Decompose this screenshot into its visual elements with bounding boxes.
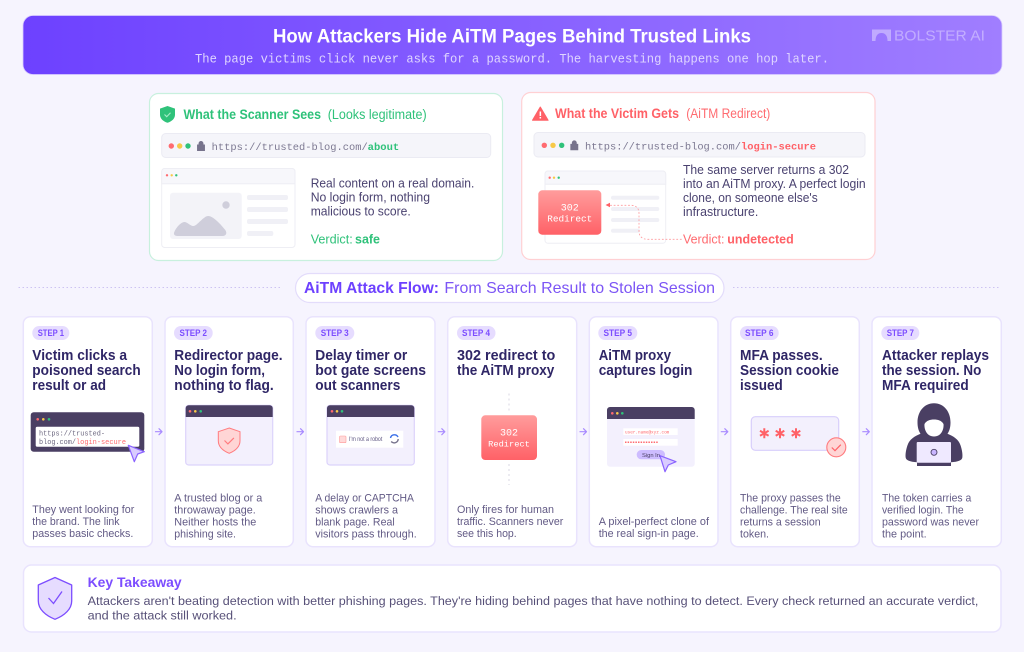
step heading: captures login [599, 363, 692, 379]
step text: token. [740, 528, 769, 540]
section heading: attack flow: From Search Result to Stolen Session [444, 280, 715, 297]
logo: Bolster AI: BOLSTER AI [894, 28, 985, 44]
step badge: STEP 7 [887, 328, 914, 338]
panel: key takeaway [24, 565, 1001, 632]
step heading: the AiTM proxy [457, 363, 555, 379]
step 7 card [872, 317, 1001, 547]
description: infrastructure. [683, 205, 758, 219]
step 6 card [731, 317, 859, 547]
step text: blank page. Real [315, 516, 395, 528]
step 4 card [448, 317, 577, 547]
step heading [315, 348, 426, 394]
step heading: Session cookie [740, 363, 839, 379]
step text [882, 492, 979, 540]
takeaway heading: Key Takeaway [88, 574, 182, 590]
description: The same server returns a 302 [683, 163, 849, 177]
icon: captcha browser [327, 405, 414, 465]
icon: browser link with cursor: blog.com/ [39, 439, 76, 447]
step text: the real sign-in page. [599, 528, 699, 540]
icon: browser with shield [186, 405, 273, 465]
verdict: undetected: Verdict: [683, 233, 724, 247]
takeaway text [88, 594, 978, 622]
step text: the point. [882, 528, 927, 540]
step heading: 302 redirect to [457, 348, 555, 364]
step badge [457, 326, 496, 340]
step badge: STEP 6 [745, 328, 774, 338]
step 3 card [306, 317, 435, 547]
step text: A pixel-perfect clone of [599, 516, 710, 528]
step text: passes basic checks. [32, 528, 133, 540]
description: No login form, nothing [311, 191, 430, 205]
icon: green shield [160, 106, 175, 123]
step heading: MFA required [882, 378, 969, 394]
step text: They went looking for [32, 504, 135, 516]
icon: fake sign-in page [607, 407, 695, 472]
step heading: Attacker replays [882, 348, 989, 364]
icon: fake sign-in page: user.name@xyz.com [625, 429, 670, 435]
step text: The proxy passes the [740, 492, 841, 504]
icon: 302 redirect badge [481, 394, 537, 485]
step heading: out scanners [315, 378, 400, 394]
description [311, 176, 474, 219]
step badge [32, 326, 69, 340]
step text: visitors pass through. [315, 528, 417, 540]
panel heading [184, 107, 427, 122]
subtitle: The page victims click never asks for a password. The harvesting happens one hop later. [195, 51, 829, 66]
redirect badge: 302 [561, 203, 579, 214]
arrow [721, 429, 728, 435]
step badge [315, 326, 354, 340]
step text: phishing site. [174, 528, 236, 540]
step 1 card [23, 317, 152, 547]
step badge: STEP 4 [462, 328, 490, 338]
step heading: bot gate screens [315, 363, 426, 379]
step heading: AiTM proxy [599, 348, 672, 364]
verdict: safe [311, 233, 380, 247]
panel heading [555, 106, 770, 121]
dotted arrow [606, 203, 682, 239]
verdict: undetected [683, 233, 794, 247]
step badge: STEP 5 [604, 328, 632, 338]
description: Real content on a real domain. [311, 176, 474, 190]
step badge: STEP 3 [321, 328, 349, 338]
step badge [740, 326, 779, 340]
panel heading: What the Victim Gets [555, 106, 679, 121]
arrow [156, 429, 162, 435]
webpage wireframe with redirect [538, 171, 682, 243]
step heading: Delay timer or [315, 348, 408, 364]
arrow [863, 429, 869, 435]
step 5 card [589, 317, 718, 547]
step heading: Victim clicks a [32, 348, 128, 364]
step heading [174, 348, 283, 394]
step heading [740, 348, 839, 394]
step text: see this hop. [457, 528, 517, 540]
step heading: MFA passes. [740, 348, 823, 364]
description [683, 163, 866, 219]
step text [740, 492, 848, 540]
section heading: attack flow: AiTM Attack Flow: [304, 280, 439, 297]
icon: browser link with cursor: https://trusted- [39, 430, 105, 438]
step heading [599, 348, 692, 379]
step text: verified login. The [882, 504, 964, 516]
step badge: STEP 1 [38, 328, 64, 338]
panel heading: What the Scanner Sees [184, 107, 321, 122]
takeaway text: and the attack still worked. [88, 608, 237, 622]
description: clone, on someone else's [683, 191, 818, 205]
step text: A trusted blog or a [174, 492, 263, 504]
icon: fake sign-in page: Sign In [642, 453, 660, 459]
panel heading: (Looks legitimate) [328, 107, 427, 122]
step text [32, 504, 135, 540]
step heading: nothing to flag. [174, 378, 274, 394]
icon: warning triangle [532, 107, 548, 120]
step badge [174, 326, 213, 340]
verdict: safe: safe [355, 233, 380, 247]
step text: the brand. The link [32, 516, 120, 528]
step text: Neither hosts the [174, 516, 256, 528]
step 2 card [165, 317, 293, 547]
url bar: about [368, 142, 399, 154]
redirect badge: Redirect [547, 214, 592, 225]
panel: what the scanner sees [150, 94, 502, 260]
icon: 302 redirect badge: 302 [500, 429, 518, 440]
step text [599, 516, 710, 540]
url bar [534, 132, 865, 157]
url bar: login-secure [741, 142, 816, 154]
step heading: the session. No [882, 363, 981, 379]
url bar: https://trusted-blog.com/ [585, 142, 741, 154]
arrow [580, 429, 586, 435]
description: into an AiTM proxy. A perfect login [683, 177, 866, 191]
url bar [162, 134, 491, 158]
step text: A delay or CAPTCHA [315, 492, 415, 504]
panel: what the victim gets [522, 92, 875, 260]
verdict: safe: Verdict: [311, 233, 353, 247]
step text [457, 504, 564, 540]
arrow [297, 429, 304, 435]
step badge: STEP 2 [180, 328, 207, 338]
url bar: https://trusted-blog.com/ [212, 142, 368, 154]
step heading: No login form, [174, 363, 265, 379]
step text: Only fires for human [457, 504, 554, 516]
step heading: result or ad [32, 378, 106, 394]
step heading [32, 348, 141, 394]
step badge [881, 326, 919, 340]
icon: takeaway shield [38, 578, 72, 619]
takeaway text: Attackers aren't beating detection with better phishing pages. They're hiding behind pages that have nothing to detect. Every check returned an accurate verdict, [88, 594, 978, 608]
step text: The token carries a [882, 492, 972, 504]
step text: password was never [882, 516, 979, 528]
step badge [598, 326, 637, 340]
icon: password check [751, 417, 846, 457]
arrow [438, 429, 445, 435]
panel heading: (AiTM Redirect) [686, 106, 770, 121]
step text: challenge. The real site [740, 504, 848, 516]
step heading [882, 348, 989, 394]
title: How Attackers Hide AiTM Pages Behind Trusted Links [273, 26, 751, 48]
step heading: poisoned search [32, 363, 141, 379]
header banner [23, 16, 1002, 74]
step text: throwaway page. [174, 504, 256, 516]
step text: traffic. Scanners never [457, 516, 564, 528]
step heading [457, 348, 555, 379]
icon: hooded hacker [906, 403, 962, 466]
step text [315, 492, 417, 540]
step text [174, 492, 263, 540]
icon: browser link with cursor: login-secure [76, 439, 126, 447]
step heading: Redirector page. [174, 348, 283, 364]
icon: browser link with cursor [31, 412, 144, 462]
icon: 302 redirect badge: Redirect [488, 439, 530, 449]
section heading: attack flow [296, 274, 724, 302]
icon: captcha browser: I'm not a robot [349, 437, 383, 443]
redirect badge [538, 190, 601, 235]
verdict: undetected: undetected [727, 233, 794, 247]
step text: returns a session [740, 516, 821, 528]
step text: shows crawlers a [315, 504, 399, 516]
webpage wireframe [162, 168, 295, 248]
description: malicious to score. [311, 205, 411, 219]
step heading: issued [740, 378, 783, 394]
